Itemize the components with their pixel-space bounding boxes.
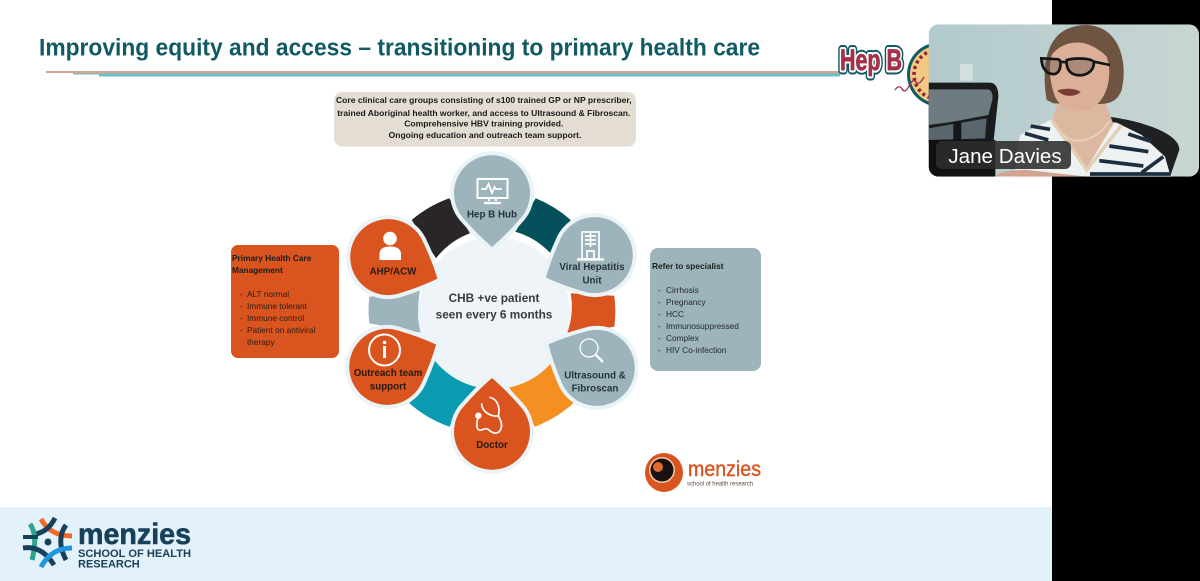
office chair: [929, 83, 998, 177]
icon: monitor: [478, 179, 508, 203]
referral criteria list: -: [658, 321, 661, 331]
glasses: [1041, 58, 1110, 75]
top description box: [334, 92, 636, 146]
centre disc: [418, 237, 570, 389]
referral criteria list: HIV Co-infection: [666, 345, 727, 355]
care cycle diagram: [337, 155, 648, 470]
icon: stethoscope: [476, 397, 501, 433]
node: Outreach team support: Outreach team: [354, 368, 423, 379]
referral criteria list: -: [658, 309, 661, 319]
management criteria list: -: [240, 301, 243, 311]
referral criteria list: Complex: [666, 333, 700, 343]
mouth: [1057, 89, 1081, 96]
menzies slide logo: menzies: [688, 458, 761, 481]
menzies footer logo: RESEARCH: [78, 558, 140, 570]
referral criteria list: -: [658, 345, 661, 355]
face: [1050, 43, 1109, 111]
centre label: seen every 6 months: [436, 308, 553, 322]
node: Viral Hepatitis Unit: [530, 205, 645, 312]
node: Ultrasound and Fibroscan: Fibroscan: [572, 384, 618, 394]
panel heading: Refer to specialist: [652, 261, 724, 271]
icon: person: [380, 232, 401, 260]
hand: [995, 170, 1087, 177]
menzies footer logo: menzies: [78, 518, 191, 551]
node: Viral Hepatitis Unit: Viral Hepatitis: [559, 262, 625, 273]
panel: primary health care management: [231, 245, 339, 358]
management criteria list: therapy: [247, 337, 276, 347]
necklace: [1061, 121, 1109, 141]
node: Outreach team support: [337, 310, 452, 417]
management criteria list: Patient on antiviral: [247, 325, 315, 335]
node: Doctor: [454, 378, 530, 470]
node: AHP/ACW: [338, 207, 453, 313]
management criteria list: -: [240, 313, 243, 323]
footer band: [0, 507, 1052, 581]
referral criteria list: Immunosuppressed: [666, 321, 739, 331]
hair: [1045, 25, 1124, 104]
node: Doctor: Doctor: [476, 440, 508, 451]
menzies slide logo: school of health research: [687, 480, 753, 488]
management criteria list: Immune tolerant: [247, 301, 308, 311]
top description box: Core clinical care groups consisting of s100 trained GP or NP prescriber,: [336, 95, 632, 105]
panel: refer to specialist: [650, 248, 761, 371]
referral criteria list: -: [658, 285, 661, 295]
panel heading: Management: [232, 265, 283, 275]
referral criteria list: Pregnancy: [666, 297, 707, 307]
wall switch: [960, 64, 973, 81]
name tag: Jane Davies: [948, 145, 1062, 168]
logo emblem: [645, 453, 683, 492]
top description box: Comprehensive HBV training provided.: [404, 118, 563, 128]
icon: magnifying glass: [580, 339, 603, 362]
icon: hospital building: [577, 232, 604, 260]
name tag: [936, 141, 1071, 169]
Hep B logo: [840, 42, 971, 106]
node: Ultrasound and Fibroscan: [532, 310, 648, 419]
wall: [929, 24, 1199, 177]
centre label: CHB +ve patient: [449, 291, 539, 305]
management criteria list: Immune control: [247, 313, 304, 323]
management criteria list: ALT normal: [247, 289, 289, 299]
menzies slide logo: [645, 453, 761, 492]
menzies footer logo: SCHOOL OF HEALTH: [78, 548, 191, 560]
logo wordmark outline: Hep B: [840, 44, 902, 77]
referral criteria list: -: [658, 297, 661, 307]
neck and chest: [1052, 104, 1114, 167]
node: AHP/ACW: AHP/ACW: [370, 266, 417, 278]
panel heading: Primary Health Care: [232, 253, 312, 263]
icon: information: [369, 334, 400, 366]
menzies footer logo: [23, 518, 191, 570]
node: Hep B Hub: Hep B Hub: [467, 210, 517, 220]
logo wordmark halo: Hep B: [840, 44, 902, 77]
speaker video: [929, 24, 1199, 177]
referral criteria list: -: [658, 333, 661, 343]
top description box: Ongoing education and outreach team support.: [389, 130, 581, 140]
node: Hep B Hub: [454, 155, 530, 247]
logo virus emblem: [895, 42, 971, 106]
management criteria list: -: [240, 325, 243, 335]
referral criteria list: HCC: [666, 309, 684, 319]
node: Viral Hepatitis Unit: Unit: [582, 276, 602, 286]
logo emblem: [23, 518, 72, 567]
node: Outreach team support: support: [370, 382, 407, 392]
title: Improving equity and access – transitioning to primary health care: [39, 34, 760, 62]
striped top: [1014, 118, 1171, 177]
management criteria list: -: [240, 289, 243, 299]
node: Ultrasound and Fibroscan: Ultrasound &: [564, 370, 626, 382]
chair back right: [1107, 117, 1179, 177]
top description box: trained Aboriginal health worker, and access to Ultrasound & Fibroscan.: [337, 108, 630, 118]
logo wordmark fill: Hep B: [840, 44, 902, 77]
title underline: [46, 71, 840, 76]
referral criteria list: Cirrhosis: [666, 285, 699, 295]
ring segments: [369, 198, 615, 427]
